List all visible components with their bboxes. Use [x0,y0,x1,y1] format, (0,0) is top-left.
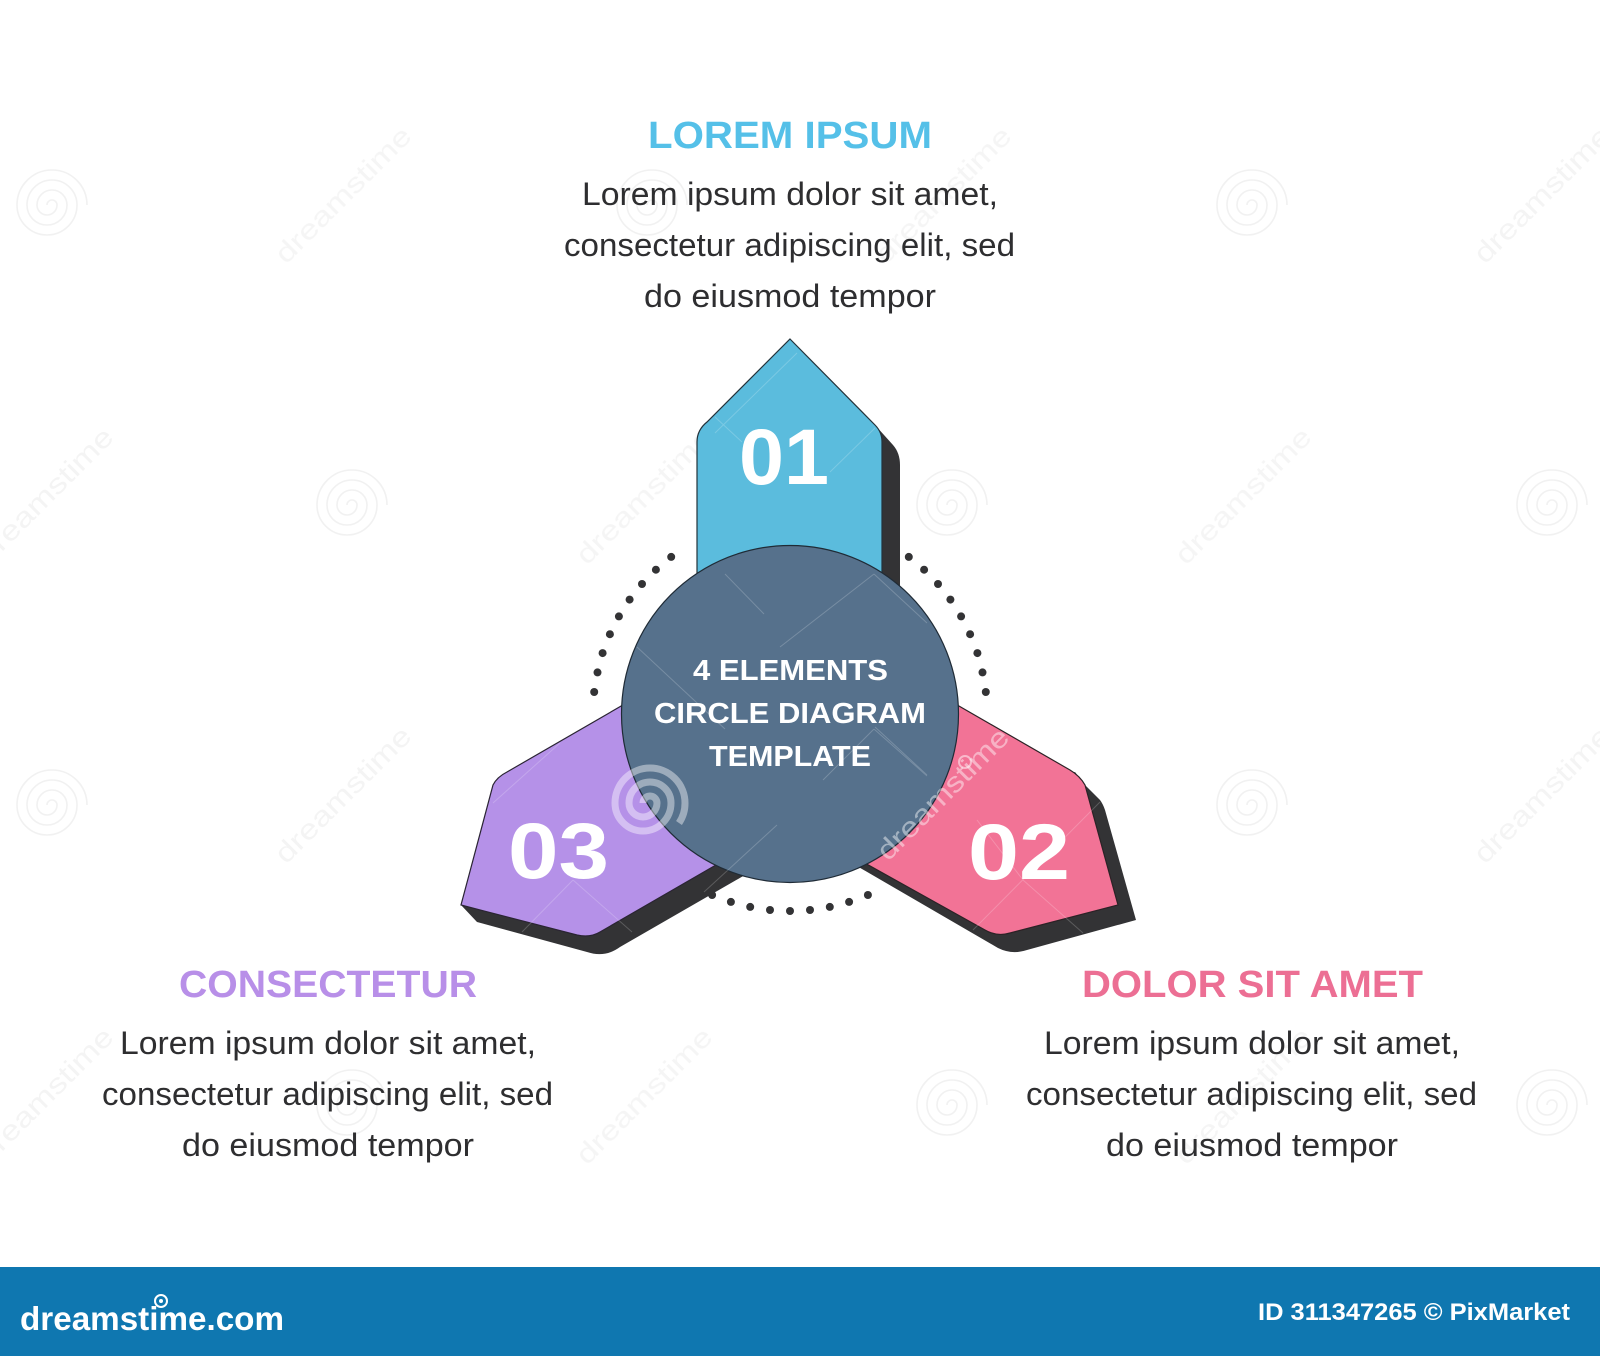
arrow 02: pink [845,672,1136,952]
arrow 01 body [697,339,882,620]
arrow 01 shadow [860,425,900,600]
center disc [622,546,958,882]
heading: consectetur: CONSECTETUR [179,964,477,1006]
foreground watermark: dreamstime [870,721,1015,866]
number 01: 01 [739,412,829,501]
body text: consectetur [102,1025,553,1163]
number 02: 02 [968,807,1070,896]
text block: consectetur [102,964,553,1163]
watermark pattern: dreamstime [1467,720,1600,869]
arrow 03: purple [461,672,745,954]
watermark pattern [0,120,1600,1170]
body text: dolor sit amet: consectetur adipiscing elit, sed [1026,1076,1477,1112]
watermark pattern: dreamstime [268,720,418,869]
watermark pattern: dreamstime [268,120,418,269]
heading: dolor sit amet: DOLOR SIT AMET [1082,964,1423,1006]
watermark pattern: dreamstime [1168,1021,1318,1170]
watermark pattern: dreamstime [1467,120,1600,269]
body text: dolor sit amet: Lorem ipsum dolor sit amet, [1044,1025,1460,1061]
body text: dolor sit amet: do eiusmod tempor [1106,1127,1398,1163]
center title: TEMPLATE [709,741,871,773]
image id credit: ID 311347265 © PixMarket [1258,1299,1570,1326]
text block: lorem ipsum [564,115,1015,314]
dotted ring [590,553,990,915]
arrow 03 body [461,672,735,936]
body text: lorem ipsum: consectetur adipiscing elit, sed [564,227,1015,263]
center title [654,655,926,773]
body text: dolor sit amet [1026,1025,1477,1163]
watermark pattern: dreamstime [868,120,1018,269]
foreground watermark [493,353,1100,933]
watermark pattern: dreamstime [569,421,719,570]
watermark pattern: dreamstime [569,1021,719,1170]
body text: consectetur: consectetur adipiscing elit, sed [102,1076,553,1112]
arrow 01: blue [697,339,900,620]
body text: consectetur: Lorem ipsum dolor sit amet, [120,1025,536,1061]
arrow 02 body [845,672,1118,934]
body text: lorem ipsum: Lorem ipsum dolor sit amet, [582,176,998,212]
footer bar [0,1267,1600,1356]
body text: lorem ipsum [564,176,1015,314]
number 03: 03 [508,806,609,895]
center circle [622,546,958,882]
heading: lorem ipsum: LOREM IPSUM [648,115,932,157]
footer background [0,1267,1600,1356]
text block: dolor sit amet [1026,964,1477,1163]
watermark pattern: dreamstime [1168,421,1318,570]
center title: 4 ELEMENTS [693,655,888,687]
body text: lorem ipsum: do eiusmod tempor [644,278,936,314]
center title: CIRCLE DIAGRAM [654,698,926,730]
arrow 02 shadow [850,772,1136,952]
body text: consectetur: do eiusmod tempor [182,1127,474,1163]
footer logo: dreamstime.com [20,1300,284,1337]
arrow 03 shadow [461,800,745,954]
